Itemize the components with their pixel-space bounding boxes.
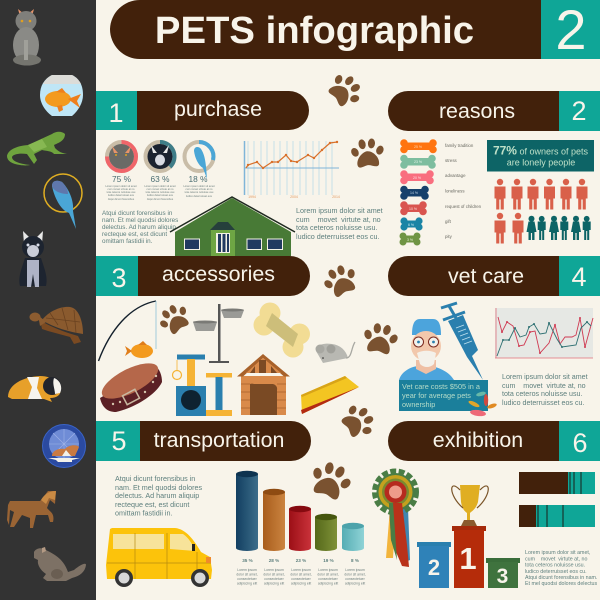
icon: grey cat [13, 9, 41, 66]
text block: vet care [502, 373, 588, 407]
text block: transportation: nam. Et mel quodsi dolores [115, 483, 202, 492]
bar captions: consectetuer [291, 577, 312, 581]
text block: transportation: Atqui dicunt forensibus in [115, 474, 195, 483]
bone labels: advantage [445, 173, 466, 178]
bar captions [236, 568, 366, 586]
title banner [110, 0, 600, 61]
tiny captions: Atqui dicunt forensibus [108, 197, 135, 201]
icon: parakeet in ring [44, 174, 82, 229]
bone labels: family tradition [445, 143, 474, 148]
icon: fishing rod with fish [98, 301, 156, 361]
callout: 77% of owners: are lonely people [507, 158, 575, 168]
vet caption: Vet care costs $505 in a [402, 382, 481, 391]
bar 19% [315, 514, 337, 551]
bone 23%: 23 % [414, 160, 422, 164]
tiny captions: tota ceteros noluisse usu [107, 190, 136, 194]
tiny captions: cum movet virtute at no [186, 187, 213, 191]
header 6: exhibition: exhibition [433, 428, 523, 452]
text block: vet care: ludico deterruisset eos cu. [502, 399, 584, 407]
text block: transportation: recteque est, est dicunt [115, 500, 189, 509]
line chart: purchase trend: 2014 [332, 195, 340, 199]
header 3: accessories: 3 [111, 263, 127, 293]
icon: husky [19, 231, 47, 287]
progress bar 1 [519, 472, 595, 494]
tiny captions: tota ceteros noluisse usu [146, 190, 175, 194]
bone 20%: 20 % [413, 176, 421, 180]
text block: purchase right: ludico deterruisset eos cu. [296, 232, 380, 241]
vet caption [399, 380, 488, 411]
icon: horse [7, 491, 56, 528]
tiny captions: ludico deterruisset eos [108, 193, 135, 197]
bar 23% [289, 506, 311, 551]
header 1: purchase: purchase [174, 97, 262, 121]
ring: parakeet 18%: 18 % [189, 174, 208, 184]
icon: pet food dish [301, 376, 359, 414]
bone labels: stress [445, 158, 458, 163]
progress bar 2 [519, 505, 595, 527]
trophy [452, 485, 488, 526]
header 2: reasons [388, 91, 600, 131]
bone chart: reasons [400, 139, 482, 246]
bone 10%: 10 % [409, 207, 417, 211]
tiny captions: Atqui dicunt forensibus [147, 197, 174, 201]
tiny captions: Lorem ipsum dolor sit amet [105, 184, 137, 188]
bar captions: adipiscing elit [291, 582, 311, 586]
header 5: transportation: 5 [111, 426, 127, 456]
bone 3%: 3 % [407, 238, 413, 242]
bar captions: consectetuer [318, 577, 339, 581]
bar captions: dolor sit amet, [344, 572, 366, 576]
icon: dog collar [97, 356, 163, 412]
text block: exhibition: tota ceteros noluisse usu. [525, 562, 585, 568]
text block: purchase left: Atqui dicunt forensibus in [102, 210, 173, 217]
vet caption: ownership [402, 400, 435, 409]
tiny captions: tota ceteros noluisse usu [185, 190, 214, 194]
bar values: 23 % [296, 558, 306, 563]
bar 8% [342, 523, 364, 551]
vet body and head [399, 319, 454, 380]
line chart: purchase trend [244, 141, 340, 199]
bar values: 28 % [269, 558, 279, 563]
bar captions: adipiscing elit [318, 582, 338, 586]
vet caption: year for average pets [402, 391, 471, 400]
tiny captions: ludico deterruisset eos [147, 193, 174, 197]
icon: green house [170, 197, 295, 256]
bar captions: Lorem ipsum [345, 568, 365, 572]
icon: toy mouse [316, 342, 355, 363]
text block: transportation [115, 474, 202, 518]
icon: green iguana [7, 132, 67, 165]
bar captions: adipiscing elit [237, 582, 257, 586]
step 1: 1 [459, 541, 477, 576]
text block: vet care: Lorem ipsum dolor sit amet [502, 373, 588, 381]
tiny captions: cum movet virtute at no [108, 187, 135, 191]
bone labels: loneliness [445, 188, 465, 194]
bone labels: request of children [445, 204, 482, 209]
purchase percentage rings [105, 142, 215, 201]
icon: dog house [237, 354, 290, 415]
pills [468, 391, 497, 417]
text block: exhibition [525, 550, 597, 587]
icon: guinea pig [8, 376, 61, 402]
callout: 77% of owners [487, 140, 594, 172]
bar captions: dolor sit amet, [236, 572, 258, 576]
step 3: 3 [497, 565, 508, 588]
bar captions: Lorem ipsum [264, 568, 284, 572]
text block: purchase left [102, 210, 178, 245]
bar captions: consectetuer [237, 577, 258, 581]
icon: hamster wheel [42, 424, 86, 468]
text block: purchase left: delectus. Ad harum aliquip [102, 224, 176, 231]
icon: big bone [254, 302, 310, 358]
line chart: purchase trend: 2004 [290, 195, 298, 199]
text block: exhibition: ludico deterruisset eos cu. [525, 569, 587, 575]
bar captions: dolor sit amet, [290, 572, 312, 576]
ring: husky 63%: 63 % [151, 174, 170, 184]
bone 14%: 14 % [410, 191, 418, 195]
bar captions: consectetuer [345, 577, 366, 581]
header 5: transportation: transportation [154, 428, 284, 452]
header 3: accessories [96, 256, 310, 296]
icon: goldfish bowl [40, 75, 83, 116]
sidebar of pets [0, 0, 96, 600]
text block: purchase right: cum movet virtute at, no [296, 215, 381, 224]
ring: cat 75%: 75 % [112, 174, 132, 184]
bar captions: Lorem ipsum [237, 568, 257, 572]
text block: purchase right [296, 206, 383, 241]
header 6: exhibition [388, 421, 600, 461]
text block: vet care: tota ceteros noluisse usu. [502, 390, 582, 398]
pictogram: people [494, 179, 591, 244]
header 3: accessories: accessories [162, 262, 275, 286]
line chart: vet care [495, 308, 593, 358]
tiny captions: Lorem ipsum dolor sit amet [144, 184, 176, 188]
bar 35% [236, 471, 258, 551]
header 5: transportation [96, 421, 311, 461]
header 1: purchase [96, 91, 309, 130]
icon: veterinarian with syringe [399, 303, 497, 417]
icon: chinchilla [34, 547, 86, 581]
bar captions: adipiscing elit [345, 582, 365, 586]
tiny captions [105, 184, 215, 201]
icon: tortoise [30, 307, 83, 344]
bar captions: Lorem ipsum [318, 568, 338, 572]
text block: transportation: omittam fastidii in. [115, 508, 173, 518]
bar captions: dolor sit amet, [263, 572, 285, 576]
bar captions: adipiscing elit [264, 582, 284, 586]
text block: purchase right: tota ceteros noluisse usu. [296, 223, 378, 232]
text block: purchase left: nam. Et mel quodsi dolores [102, 217, 178, 224]
text block: purchase left: recteque est, est dicunt [102, 231, 167, 238]
line chart: purchase trend: 1994 [248, 195, 256, 199]
bar captions: consectetuer [264, 577, 285, 581]
text block: vet care: cum movet virtute at, no [502, 382, 586, 390]
bar chart: cylinders [236, 471, 366, 586]
icon: cat tree [172, 354, 232, 416]
icon: trophy and podium [417, 485, 520, 588]
icon: yellow van [106, 528, 212, 587]
text block: purchase left: omittam fastidii in. [102, 238, 153, 245]
text block: transportation: delectus. Ad harum aliquip [115, 491, 199, 500]
text block: exhibition: Atqui dicunt forensibus in nam. [525, 575, 597, 581]
tiny captions: Lorem ipsum dolor sit amet [183, 184, 215, 188]
text block: exhibition: Lorem ipsum dolor sit amet, [525, 550, 590, 556]
bar 28% [263, 489, 285, 551]
title: PETS infographic [155, 9, 474, 52]
tiny captions: ludico deterruisset eos [186, 194, 213, 198]
step 2: 2 [428, 555, 440, 580]
bar values: 19 % [323, 558, 334, 563]
header 4: vet care: 4 [571, 262, 587, 292]
header 2: reasons: reasons [439, 99, 515, 123]
bone labels [445, 143, 482, 239]
bar values [242, 558, 359, 563]
callout: 77% of owners: 77% of owners of pets [493, 144, 589, 158]
bar values: 8 % [351, 558, 359, 563]
bar values: 35 % [242, 558, 253, 563]
bone 6%: 6 % [408, 223, 414, 227]
icon: rosette [374, 471, 416, 567]
header 1: purchase: 1 [108, 98, 124, 128]
header 6: exhibition: 6 [572, 428, 588, 458]
syringe [441, 303, 483, 380]
header 2: reasons: 2 [571, 96, 587, 126]
text block: exhibition: cum movet virtute at, no [525, 556, 587, 562]
tiny captions: cum movet virtute at no [147, 187, 174, 191]
paw prints [153, 67, 401, 503]
text block: purchase right: Lorem ipsum dolor sit amet [296, 206, 383, 215]
text block: exhibition: Et mel quodsi dolores delectus [525, 581, 597, 587]
header 4: vet care: vet care [448, 264, 524, 288]
bone 25%: 25 % [414, 145, 422, 149]
bar captions: dolor sit amet, [317, 572, 339, 576]
bone labels: pity [445, 234, 453, 239]
header 4: vet care [388, 256, 600, 296]
bone labels: gift [445, 219, 452, 224]
icon: bowl stand [193, 304, 244, 363]
bar captions: Lorem ipsum [291, 568, 311, 572]
stacked progress bars [519, 472, 595, 527]
